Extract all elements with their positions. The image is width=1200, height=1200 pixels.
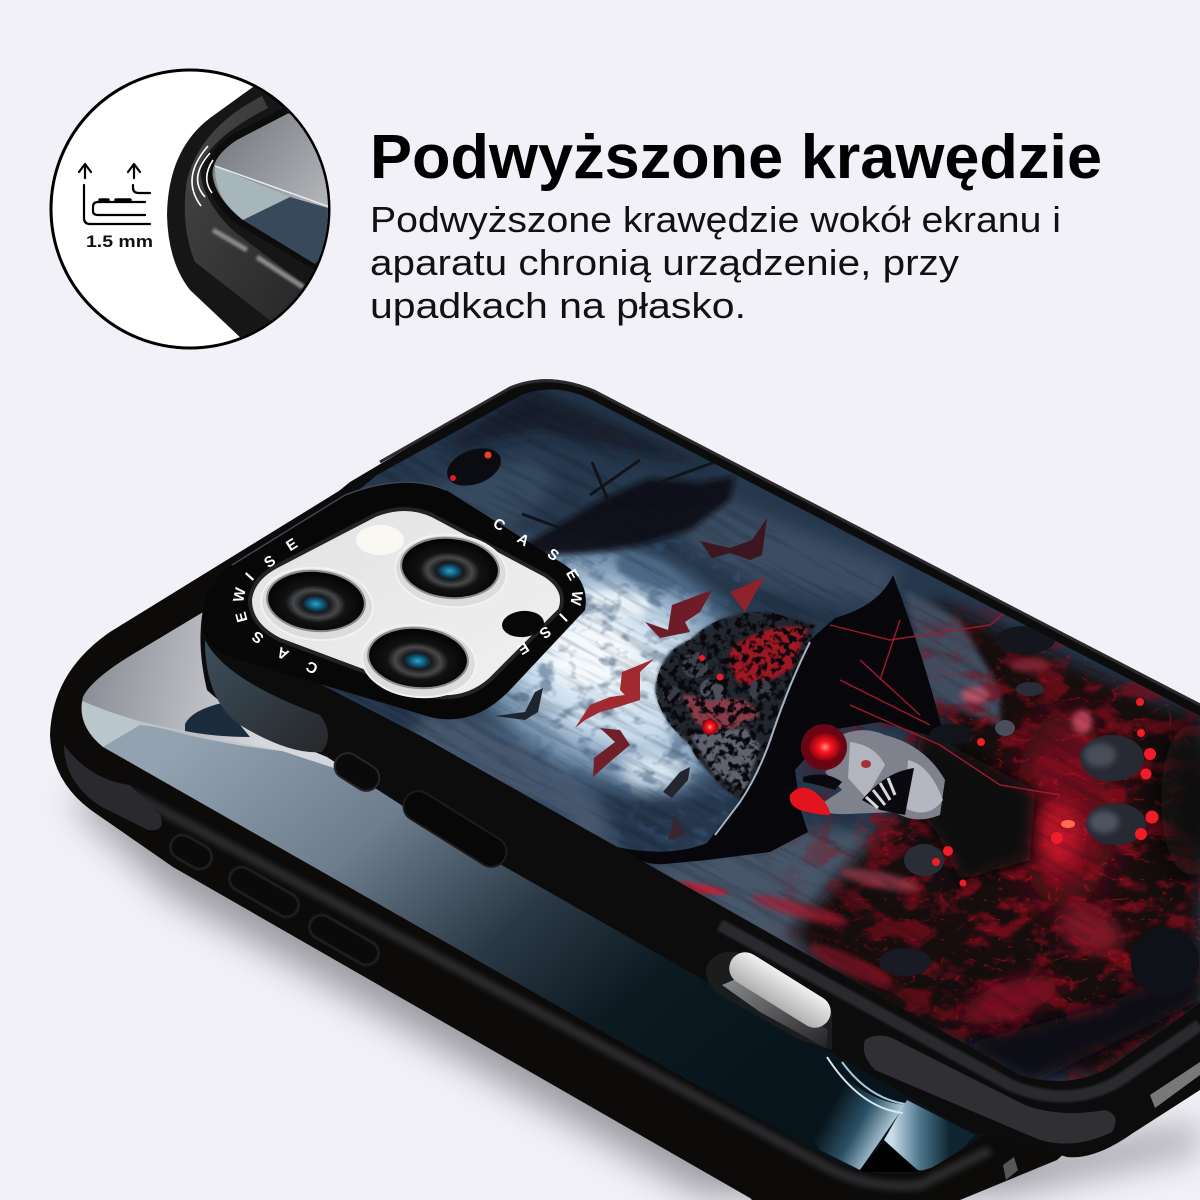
lower left cloud	[408, 714, 612, 839]
artwork panel	[320, 390, 1200, 1081]
right dark zone	[790, 600, 1200, 1080]
bright sky patch top	[570, 591, 650, 619]
window gradient	[82, 612, 986, 1174]
bats	[495, 518, 767, 840]
CASEWISE ring lettering	[230, 515, 586, 677]
skull face	[815, 730, 945, 819]
red veins	[785, 597, 1200, 1081]
CASEWISE ring lettering: S	[249, 627, 267, 647]
port button	[723, 946, 837, 1034]
case corner	[167, 80, 345, 340]
CASEWISE ring lettering: I	[556, 610, 570, 624]
orb 1	[1080, 735, 1144, 781]
island outer ring	[202, 482, 586, 719]
lower red streaks	[676, 880, 730, 896]
line 1: Podwyższone krawędzie wokół ekranu i	[370, 199, 1061, 240]
line 3: upadkach na płasko.	[370, 285, 746, 326]
camera island	[202, 482, 586, 719]
pink patches	[1072, 710, 1092, 734]
bat 3	[645, 590, 712, 638]
skull nose	[803, 774, 842, 790]
skull teeth	[866, 778, 895, 808]
lens 1 halo	[258, 563, 376, 645]
arrow right	[128, 164, 140, 178]
art base slate	[320, 390, 1200, 1081]
back phone case	[50, 478, 1090, 1200]
port lower metal	[722, 975, 828, 1048]
orb eyes	[484, 452, 492, 458]
lens 3 glass	[366, 624, 470, 692]
top rim edge	[380, 381, 1200, 705]
eye halo	[801, 724, 847, 770]
power button	[398, 786, 512, 872]
CASEWISE ring lettering: W	[230, 585, 250, 604]
brush streaks	[346, 442, 1168, 1042]
pile skull caps	[682, 652, 708, 678]
front rim lighter bevel	[720, 925, 1200, 1096]
magnified corner	[167, 80, 345, 340]
branch spikes	[522, 460, 715, 528]
lens 3 halo	[359, 620, 479, 702]
bumper patch near camera	[205, 640, 328, 752]
thickness label: 1.5 mm	[86, 233, 153, 251]
CASEWISE ring lettering: I	[242, 570, 258, 584]
back phone buttons	[166, 831, 383, 969]
grey rain	[905, 590, 1000, 725]
pile red roses	[729, 627, 808, 684]
CASEWISE ring lettering: E	[283, 535, 301, 555]
CASEWISE ring lettering: C	[490, 515, 508, 535]
black triangle	[858, 1141, 920, 1172]
shock arcs	[192, 146, 213, 206]
side port silver	[706, 946, 837, 1050]
dark reflection	[243, 197, 335, 264]
ground under hat	[597, 825, 876, 958]
camera bumps	[100, 198, 130, 202]
cloud patch lower	[621, 750, 689, 790]
lens 2 glass	[399, 534, 501, 602]
arcs	[827, 1057, 903, 1113]
right ray	[884, 1100, 975, 1172]
line 2: aparatu chronią urządzenie, przy	[370, 242, 959, 283]
phone inner	[93, 202, 145, 215]
pile grain	[640, 600, 830, 815]
orb 1 highlight	[1084, 743, 1116, 767]
red hot glow	[1038, 801, 1082, 869]
red glow	[1015, 710, 1115, 910]
bumper patch lower right	[864, 1035, 1116, 1144]
pile mass	[655, 612, 815, 805]
orb 8	[1016, 682, 1044, 696]
rim highlight	[130, 793, 990, 1186]
magnifier circle	[51, 70, 345, 348]
orb shape	[442, 441, 506, 493]
hook	[133, 185, 150, 193]
pale blue band	[79, 700, 282, 751]
hat red veins	[830, 600, 1060, 795]
left ray	[816, 1081, 904, 1170]
witch hat	[617, 575, 945, 864]
lens 1 glass	[265, 567, 367, 635]
right side speaker	[1150, 1062, 1200, 1108]
skull dark mouth	[862, 768, 914, 815]
mute switch	[330, 748, 384, 796]
dark orb top	[442, 441, 506, 493]
hat right dark extension	[905, 715, 1035, 880]
upper grey screen reflection	[82, 612, 334, 768]
hat brim light edge	[715, 642, 810, 835]
skull	[790, 724, 945, 819]
see-through window	[82, 612, 986, 1174]
front case body	[200, 379, 1200, 1157]
mic hole	[501, 609, 545, 639]
skull orbs right	[879, 626, 1199, 996]
orb 2	[1086, 803, 1146, 845]
CASEWISE ring lettering: E	[514, 638, 532, 658]
CASEWISE ring lettering: W	[566, 590, 586, 607]
lens 3	[359, 620, 479, 702]
CASEWISE ring lettering: S	[536, 622, 554, 642]
branch band	[515, 476, 735, 556]
bat 4	[575, 659, 654, 728]
lens 2	[392, 530, 510, 612]
case body	[50, 478, 1090, 1200]
skull right	[905, 760, 943, 812]
arrow left	[79, 164, 91, 178]
white line	[215, 166, 330, 207]
window	[209, 110, 335, 267]
skull pile	[653, 611, 815, 801]
island outer edge highlight	[232, 482, 446, 565]
bumper highlights	[213, 230, 303, 287]
port recess	[706, 952, 832, 1050]
volume down	[305, 911, 383, 969]
bat 6	[495, 688, 543, 720]
camera glass	[250, 509, 562, 697]
CASEWISE ring lettering: A	[274, 643, 292, 663]
CASEWISE ring lettering: S	[261, 552, 279, 572]
heading: Podwyższone krawędzie	[370, 123, 1102, 192]
raised edge icon	[79, 164, 150, 224]
top dark sky	[440, 385, 720, 470]
CASEWISE ring lettering: S	[544, 545, 562, 565]
slate cloud	[614, 556, 678, 592]
lens 2 halo	[392, 530, 510, 612]
bat 5	[593, 728, 630, 777]
skull light	[848, 742, 885, 798]
orb 9	[995, 720, 1015, 736]
pale reflection	[215, 166, 290, 220]
phone shadow	[70, 790, 1200, 1195]
action button	[166, 831, 216, 873]
pile eyes	[699, 655, 705, 661]
bottom corner darkness	[960, 950, 1200, 1085]
orb 5	[930, 724, 974, 744]
orb 7	[1131, 928, 1199, 996]
left slate glow	[438, 460, 552, 530]
lens 1	[258, 563, 376, 645]
bat 8	[668, 815, 685, 840]
bumper corner patch	[64, 745, 162, 830]
pile pink	[682, 695, 760, 735]
red noise	[778, 603, 1200, 1080]
back lower port	[1003, 1157, 1018, 1180]
red zone	[676, 597, 1200, 1081]
moonlit sky	[478, 529, 739, 803]
dark notch	[185, 703, 250, 737]
CASEWISE ring lettering: E	[232, 610, 252, 624]
red nose glint	[861, 760, 871, 768]
right edge darkness	[1161, 720, 1200, 880]
lower red eye	[790, 788, 830, 815]
cloud mottling	[440, 540, 740, 860]
volume up	[225, 863, 303, 921]
bottom light rays	[816, 1056, 975, 1172]
bat 7	[663, 767, 690, 798]
translucent bumper	[185, 96, 312, 322]
orb 4	[995, 626, 1055, 654]
right upper slate	[682, 501, 898, 608]
orb 6	[879, 948, 931, 976]
CASEWISE ring lettering: C	[303, 657, 321, 677]
CASEWISE ring lettering: E	[562, 566, 582, 584]
front phone case	[200, 379, 1200, 1158]
flash	[356, 525, 404, 555]
orb 3	[904, 844, 944, 876]
CASEWISE ring lettering: A	[514, 530, 532, 550]
description	[370, 199, 1061, 326]
bright cloud patch	[544, 621, 636, 689]
magnifier disc	[51, 70, 329, 348]
outer lip	[84, 185, 150, 224]
pile grey skull	[690, 728, 760, 790]
red orb eyes	[932, 698, 1158, 886]
bat 1	[700, 518, 767, 560]
big red eye	[809, 733, 841, 761]
bat 2	[730, 577, 765, 612]
orb 2 highlight	[1089, 811, 1119, 833]
